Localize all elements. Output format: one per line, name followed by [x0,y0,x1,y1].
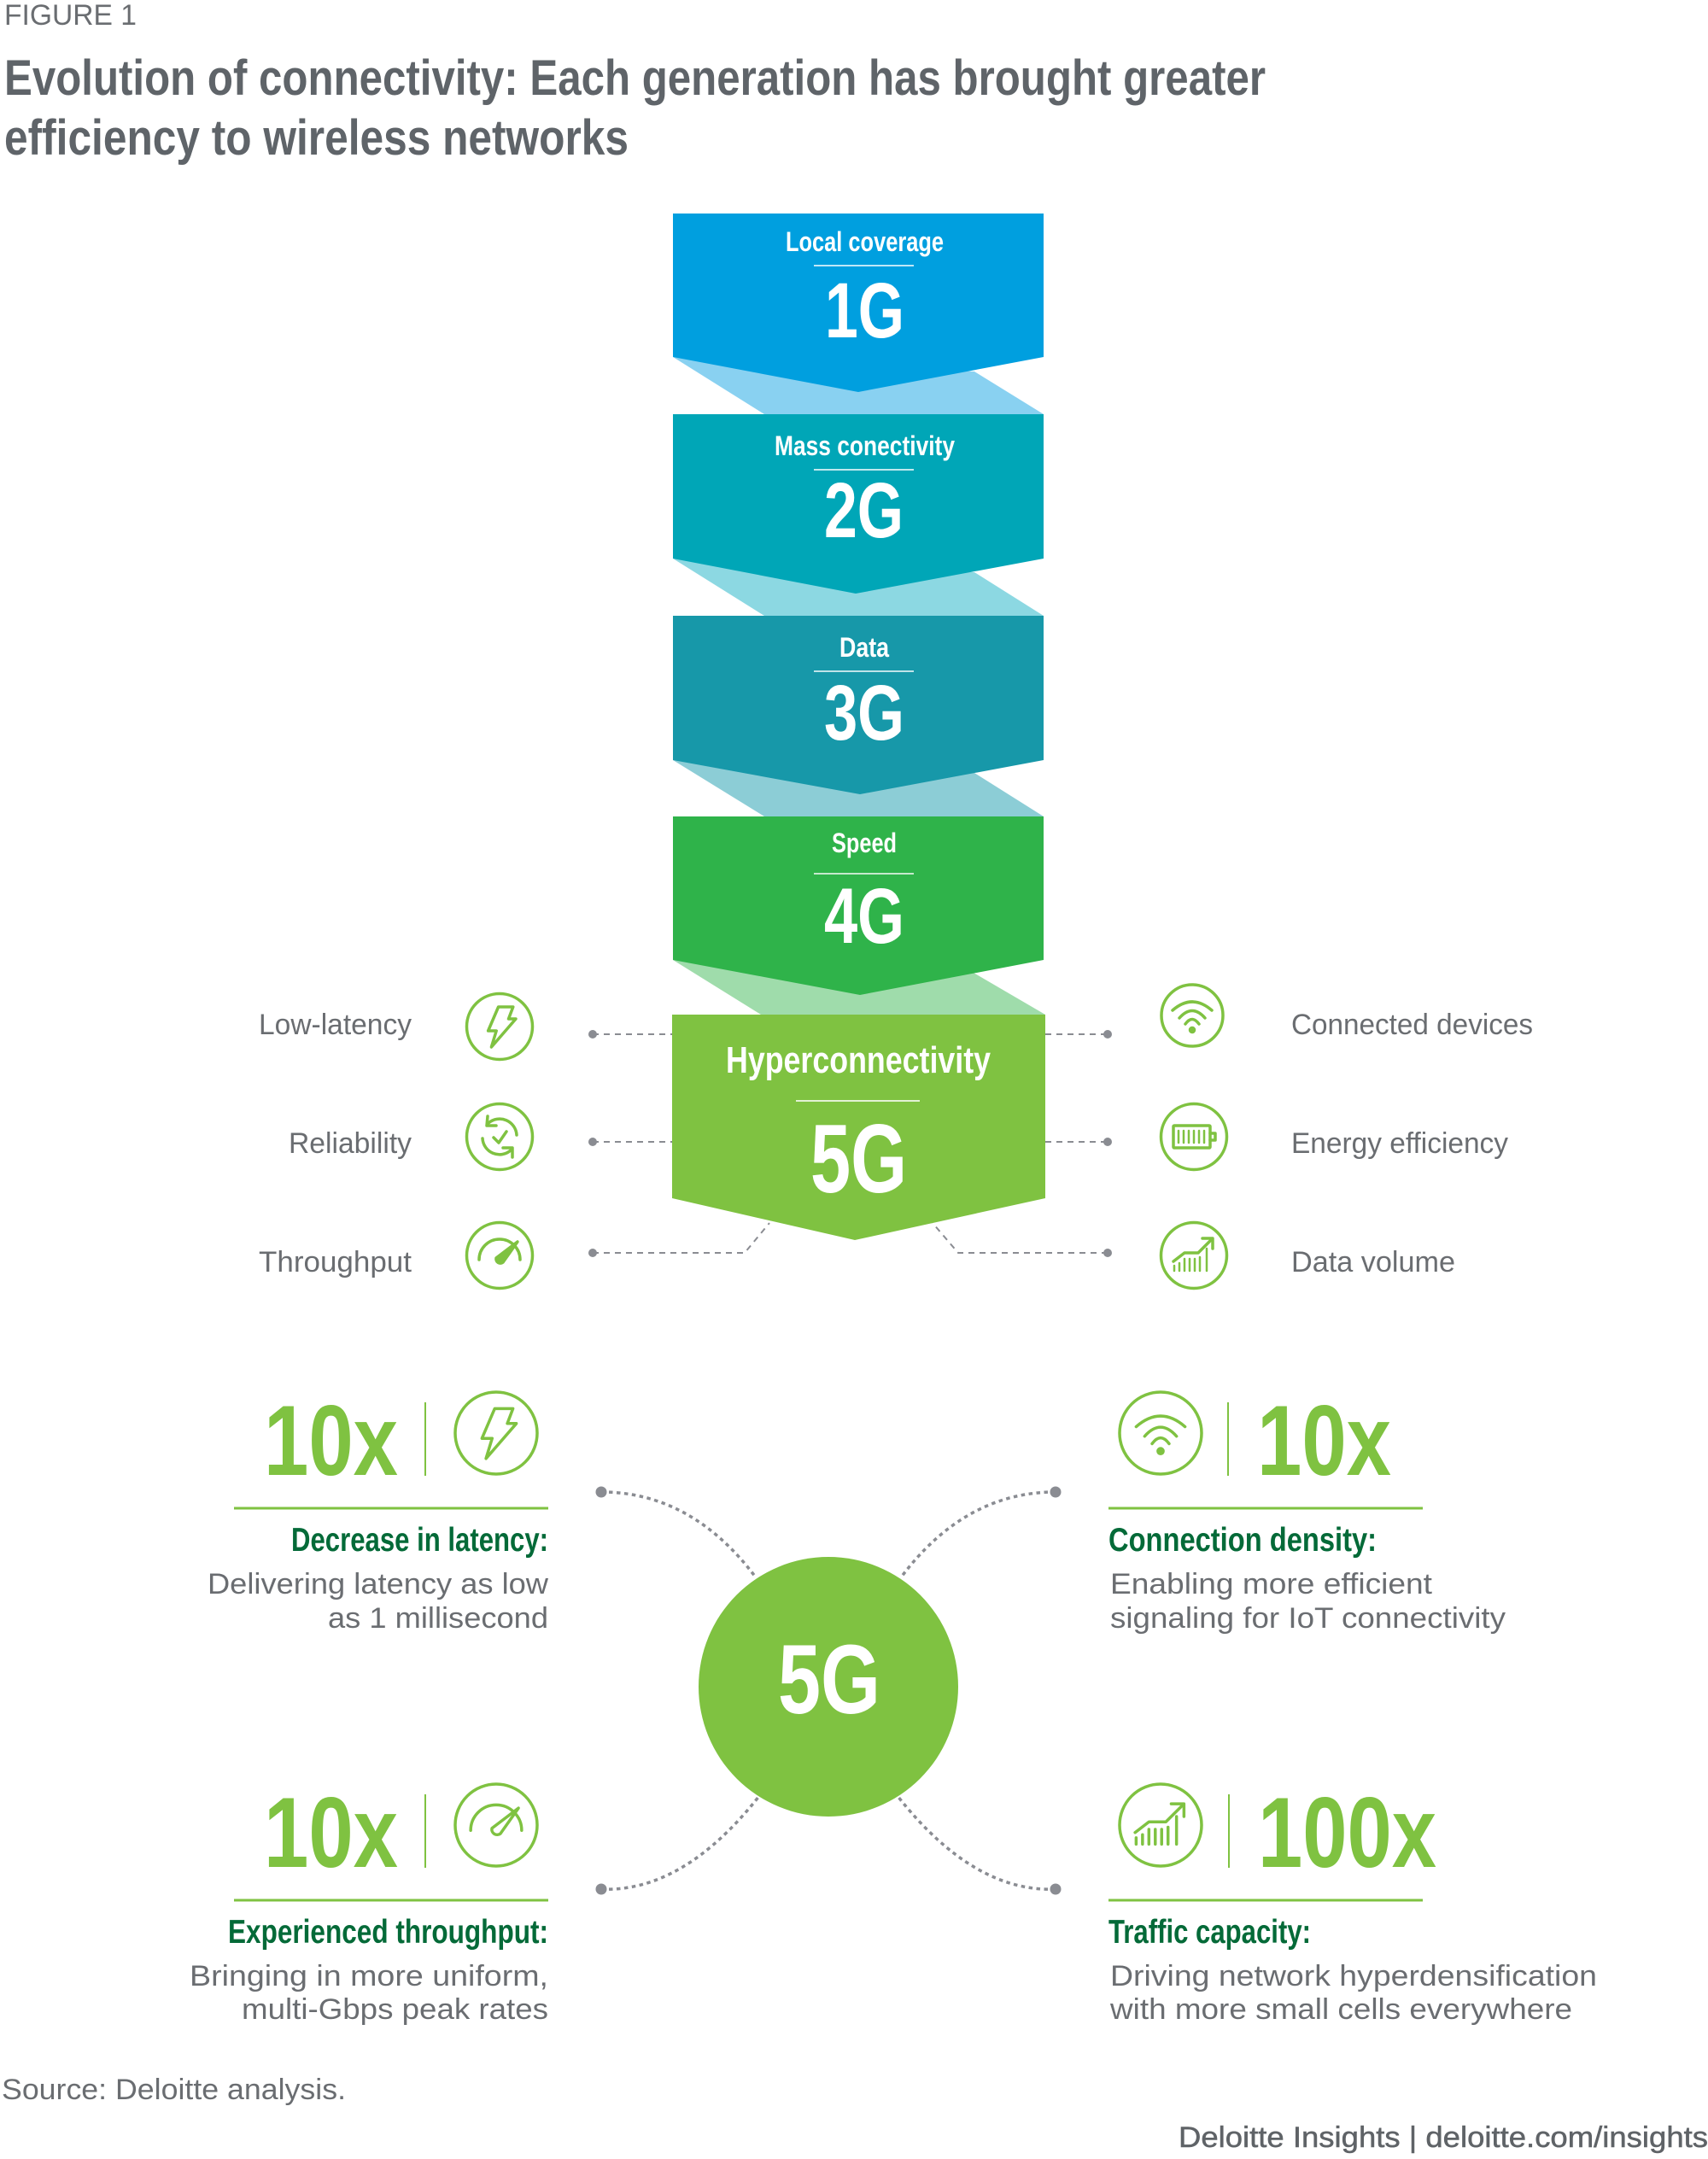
label: reliability: Reliability [289,1127,412,1160]
connector: energy efficiency [1045,1138,1112,1146]
stage: 5G hyperconnectivity [672,1015,1045,1240]
panel: connection density: Enabling more efficient [1110,1568,1433,1600]
panel: traffic capacity: Driving network hyperdensification [1110,1960,1597,1992]
icon: wifi [1161,985,1223,1046]
stage: 2G mass connectivity: Mass conectivity [775,430,955,461]
stage: 2G mass connectivity [673,414,1044,616]
panel: traffic capacity: Traffic capacity: [1108,1914,1311,1951]
panel: connection density: signaling for IoT connectivity [1110,1602,1506,1635]
panel: decrease in latency: as 1 millisecond [328,1602,548,1635]
label: low-latency: Low-latency [259,1009,412,1041]
stage: 4G speed [673,816,1045,1015]
source note: Source: Deloitte analysis. [2,2074,346,2106]
connector: connected devices [1045,1030,1112,1039]
icon: gauge [466,1223,533,1288]
stage: 3G data: Data [839,632,889,663]
footer credit: Deloitte Insights | deloitte.com/insights [1179,2121,1708,2154]
panel: decrease in latency [208,1384,548,1635]
panel: experienced throughput: Bringing in more uniform, [190,1960,548,1992]
label: energy efficiency: Energy efficiency [1291,1127,1508,1160]
stage: 1G local coverage: 1G [825,267,904,354]
panel: experienced throughput: multi-Gbps peak rates [242,1993,548,2026]
stage: 1G local coverage: Local coverage [786,226,944,257]
connector: low-latency [588,1030,672,1039]
central 5G circle with connectors: 5G [778,1625,880,1735]
panel: decrease in latency: Delivering latency as low [208,1568,548,1600]
panel: traffic capacity: with more small cells everywhere [1109,1993,1572,2026]
panel: traffic capacity [1108,1776,1597,2026]
icon: reliability refresh check [466,1103,533,1170]
panel: decrease in latency: 10x [264,1384,398,1496]
label: data volume: Data volume [1291,1246,1455,1278]
panel: connection density: 10x [1257,1384,1391,1496]
title: efficiency to wireless networks [4,110,629,166]
connector: reliability [588,1138,672,1146]
stage: 5G hyperconnectivity: 5G [810,1105,907,1214]
panel: connection density: Connection density: [1108,1522,1377,1559]
connector: throughput [588,1223,769,1257]
stage: 5G hyperconnectivity: Hyperconnectivity [726,1039,991,1081]
figure label: FIGURE 1 [4,0,137,32]
stage: 3G data [673,616,1044,816]
label: connected devices: Connected devices [1291,1009,1533,1041]
label: throughput: Throughput [259,1246,412,1278]
icon: lightning bolt [466,994,533,1059]
panel: experienced throughput [190,1776,548,2026]
stage: 4G speed: Speed [832,828,897,858]
panel: connection density [1108,1384,1506,1635]
panel: experienced throughput: Experienced throughput: [228,1914,548,1951]
connector: data volume [933,1223,1112,1257]
panel: traffic capacity: 100x [1258,1776,1436,1888]
stage: 2G mass connectivity: 2G [824,467,904,554]
central 5G circle with connectors [596,1486,1061,1894]
icon: data growth chart [1161,1223,1226,1288]
stage: 4G speed: 4G [824,873,904,960]
panel: experienced throughput: 10x [264,1776,398,1888]
stage: 1G local coverage [673,214,1044,414]
stage: 3G data: 3G [824,670,904,757]
icon: battery [1161,1103,1226,1170]
panel: decrease in latency: Decrease in latency: [291,1522,548,1559]
title: Evolution of connectivity: Each generation has brought greater [4,50,1266,106]
title [4,50,1266,166]
